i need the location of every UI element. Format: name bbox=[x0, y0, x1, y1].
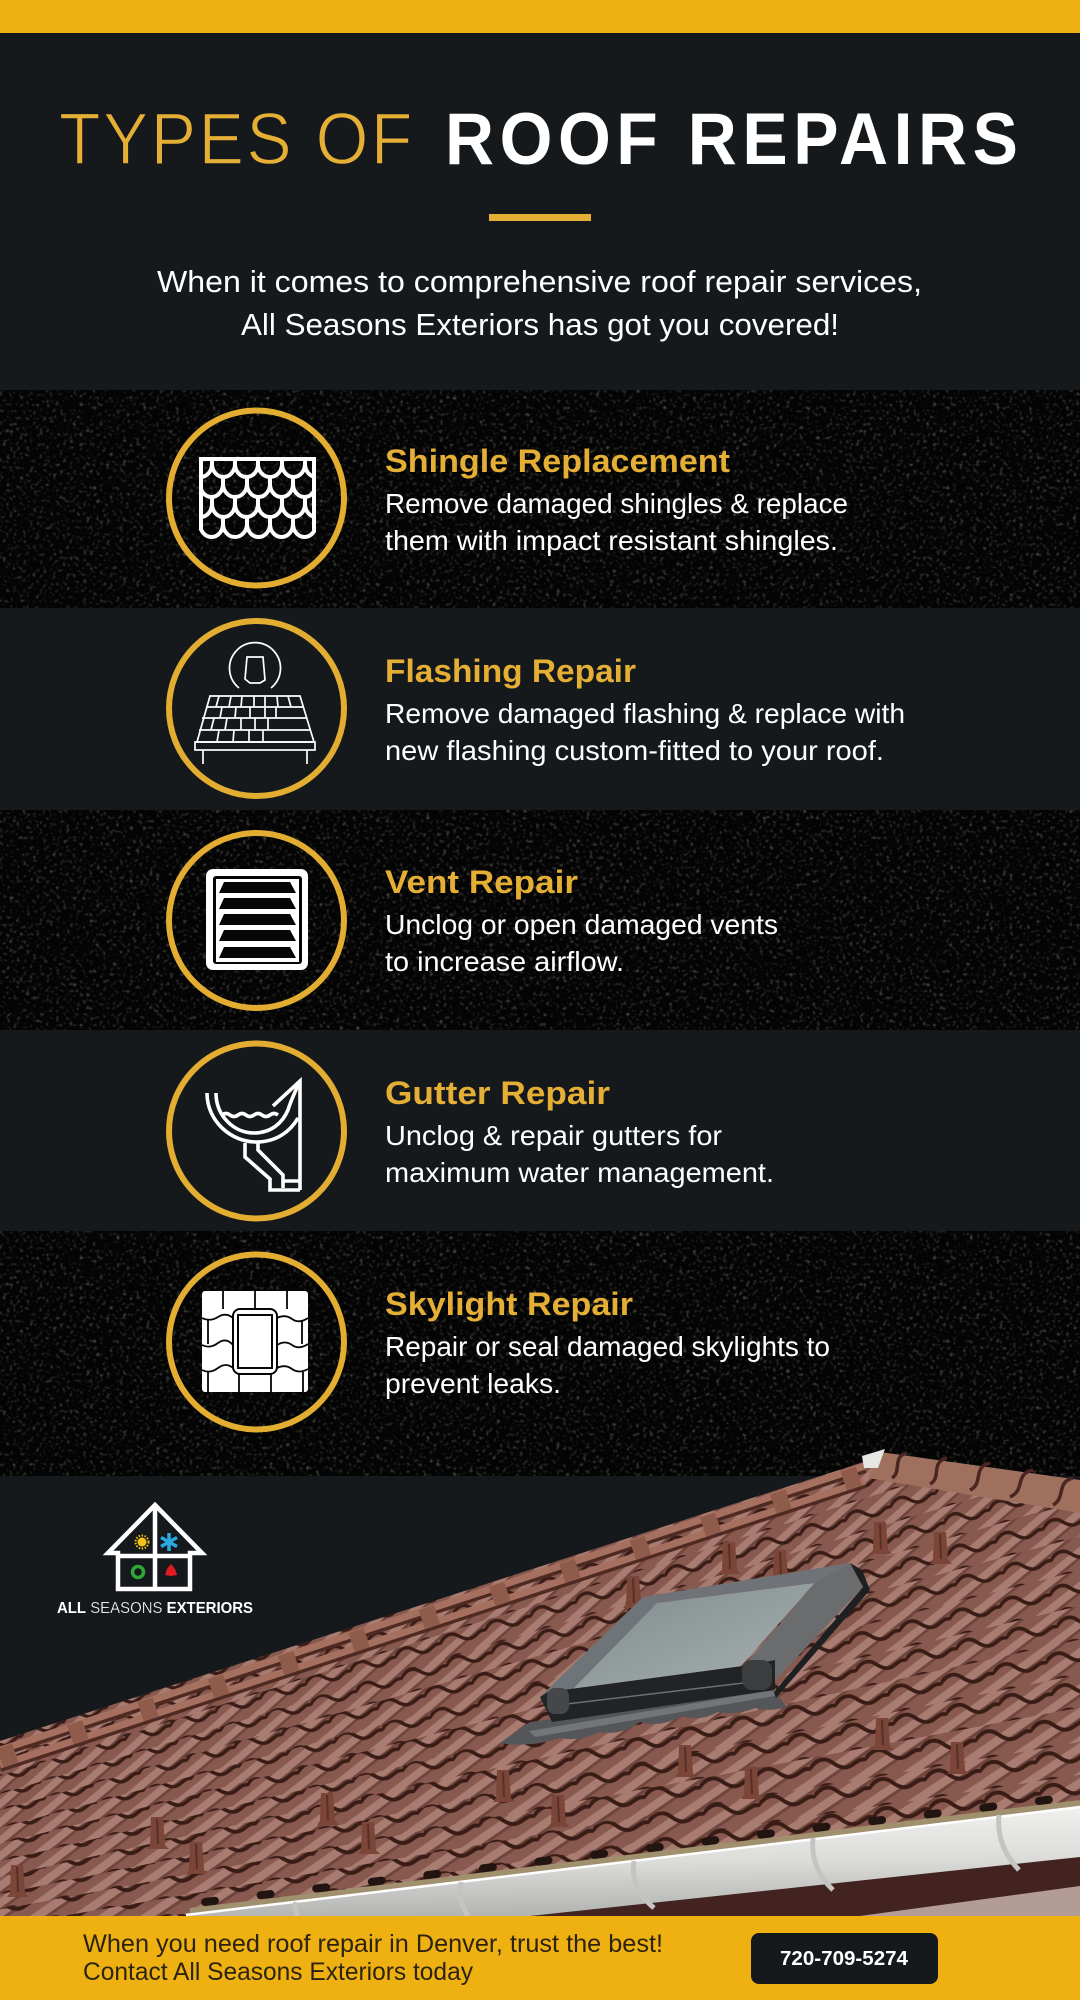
text: gutter repair: maximum water management. bbox=[385, 1157, 774, 1188]
footer bar bbox=[0, 1916, 1080, 2000]
icon: flower bbox=[132, 1566, 144, 1578]
text: flashing repair bbox=[385, 653, 905, 766]
text: gutter repair bbox=[385, 1075, 774, 1188]
text: flashing repair: Remove damaged flashing & replace with bbox=[385, 698, 905, 729]
ridge hip tiles bbox=[862, 1449, 1080, 1513]
footer text: Contact All Seasons Exteriors today bbox=[83, 1958, 473, 1986]
text: vent repair: to increase airflow. bbox=[385, 946, 624, 977]
icon: vent bbox=[169, 833, 344, 1008]
text: vent repair: Vent Repair bbox=[385, 864, 578, 900]
icon: skylight bbox=[169, 1254, 344, 1430]
title: TYPES OF bbox=[59, 98, 412, 180]
title divider bbox=[489, 214, 591, 221]
icon: leaf bbox=[165, 1564, 177, 1576]
footer text: When you need roof repair in Denver, trust the best! bbox=[83, 1930, 663, 1958]
icon: sun bbox=[136, 1536, 148, 1548]
ridge left bbox=[0, 1466, 865, 1767]
text: vent repair bbox=[385, 864, 778, 977]
panel: flashing repair bbox=[169, 621, 905, 796]
icon: flashing bbox=[169, 621, 344, 796]
roof photo illustration bbox=[0, 1449, 1080, 1916]
text: shingle replacement bbox=[385, 443, 848, 556]
title bbox=[59, 98, 1018, 180]
logo bbox=[57, 1504, 253, 1617]
snow guards bbox=[7, 1522, 969, 1897]
top yellow bar bbox=[0, 0, 1080, 33]
phone button: 720-709-5274 bbox=[780, 1948, 909, 1970]
phone button bbox=[751, 1933, 938, 1984]
title: ROOF REPAIRS bbox=[445, 98, 1018, 180]
panel: vent repair bbox=[0, 810, 1080, 1030]
text: flashing repair: new flashing custom-fitted to your roof. bbox=[385, 735, 884, 766]
icon: snowflake bbox=[161, 1533, 177, 1551]
text: skylight repair: Repair or seal damaged skylights to bbox=[385, 1331, 830, 1362]
gutter bbox=[186, 1796, 1080, 1916]
subtitle: When it comes to comprehensive roof repair services, bbox=[157, 264, 922, 299]
text: shingle replacement: Shingle Replacement bbox=[385, 443, 730, 479]
subtitle: All Seasons Exteriors has got you covered! bbox=[241, 307, 839, 342]
text: skylight repair bbox=[385, 1286, 830, 1399]
icon: house bbox=[108, 1504, 202, 1589]
text: skylight repair: prevent leaks. bbox=[385, 1368, 561, 1399]
text: vent repair: Unclog or open damaged vents bbox=[385, 909, 778, 940]
panel: shingle replacement bbox=[0, 390, 1080, 608]
skylight bbox=[500, 1563, 870, 1745]
logo wordmark: ALL SEASONS EXTERIORS bbox=[57, 1600, 253, 1617]
text: gutter repair: Gutter Repair bbox=[385, 1075, 610, 1111]
subtitle bbox=[157, 264, 922, 342]
text: shingle replacement: them with impact resistant shingles. bbox=[385, 525, 838, 556]
text: flashing repair: Flashing Repair bbox=[385, 653, 636, 689]
footer text bbox=[83, 1930, 663, 1986]
text: gutter repair: Unclog & repair gutters for bbox=[385, 1120, 722, 1151]
panel: skylight repair bbox=[0, 1231, 1080, 1476]
text: shingle replacement: Remove damaged shingles & replace bbox=[385, 488, 848, 519]
icon: shingles bbox=[169, 410, 344, 586]
text: skylight repair: Skylight Repair bbox=[385, 1286, 633, 1322]
panel: gutter repair bbox=[169, 1044, 774, 1218]
roof tiles bbox=[0, 1462, 1080, 1916]
icon: gutter bbox=[169, 1044, 344, 1218]
